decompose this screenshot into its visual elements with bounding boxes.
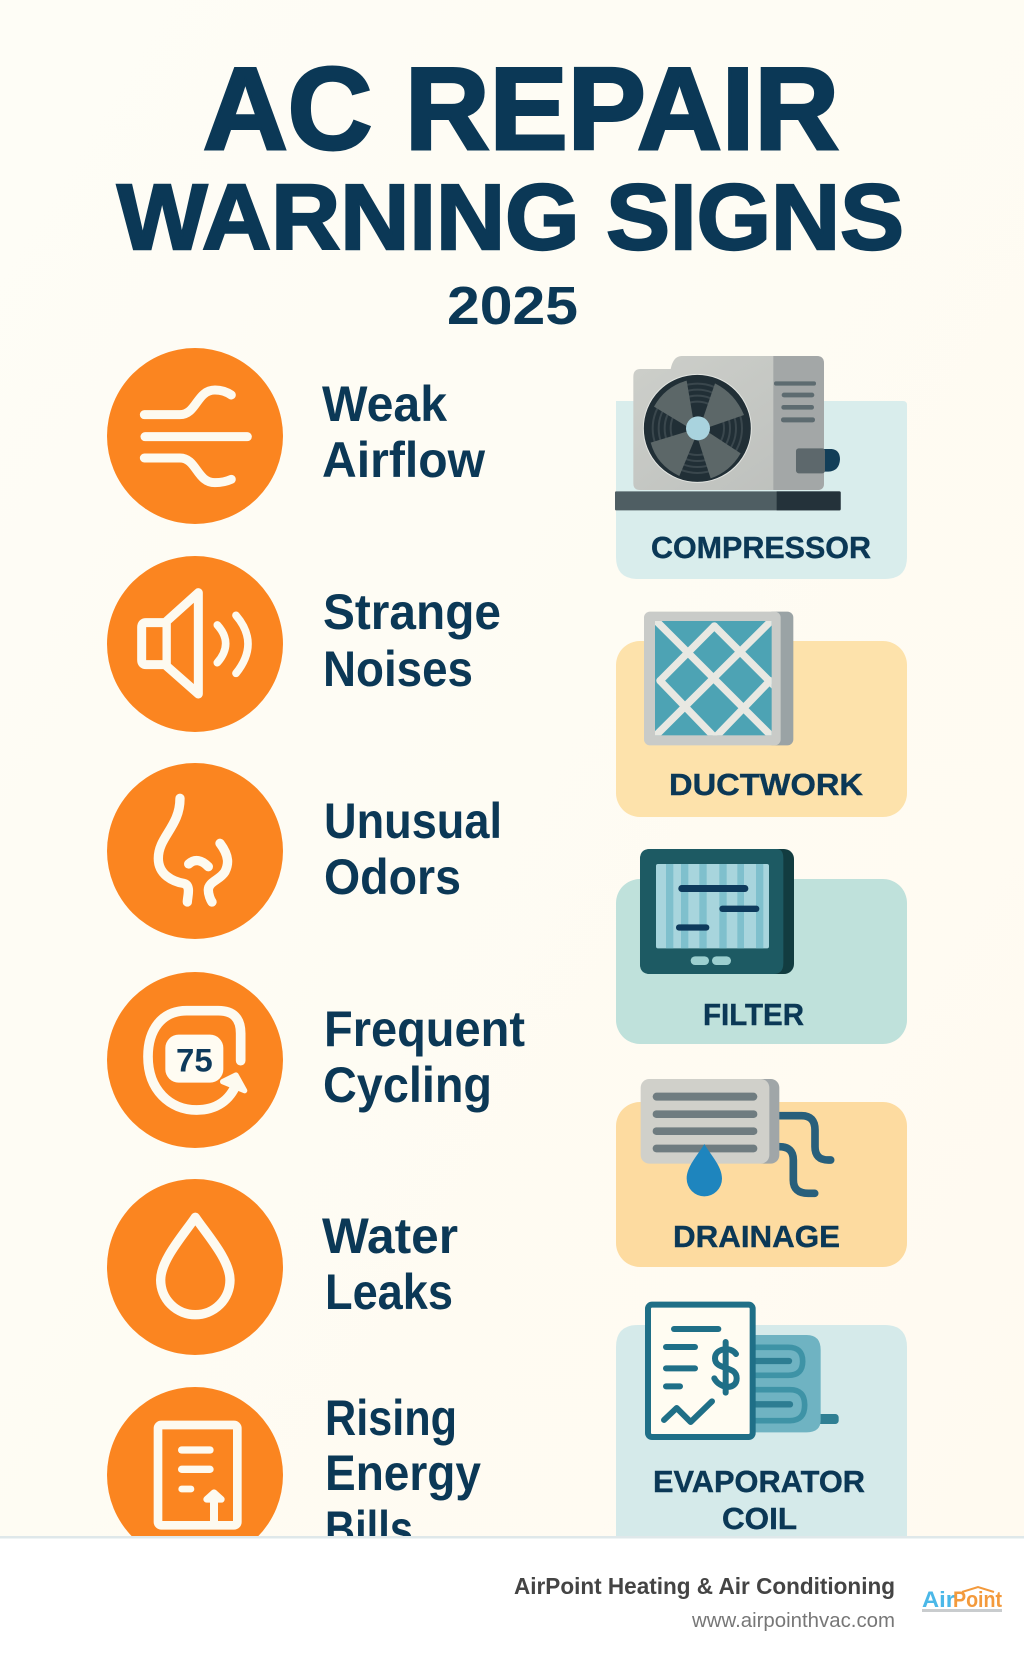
panel: filter (616, 849, 907, 1044)
icon: bill over evaporator coil (648, 1305, 839, 1437)
sign: rising energy bills (107, 1387, 481, 1563)
panel: drainage (616, 1079, 907, 1267)
label: drainage: DRAINAGE (673, 1220, 840, 1254)
icon: speaker (107, 556, 283, 732)
icon: airflow (107, 348, 283, 524)
icon: thermostat display (640, 849, 794, 974)
label: weak airflow: Weak (322, 376, 447, 432)
icon: nose (107, 763, 283, 939)
title (117, 43, 904, 336)
label: rising energy bills: Energy (325, 1445, 481, 1501)
title: 2025 (447, 276, 578, 336)
icon: thermostat cycle: 75 (176, 1043, 213, 1079)
icon: air filter grille (644, 612, 793, 745)
label: unusual odors: Unusual (324, 793, 502, 849)
label: rising energy bills: Bills (325, 1501, 413, 1557)
label: evaporator coil (653, 1465, 865, 1536)
sign: water leaks (107, 1179, 458, 1355)
label: unusual odors: Odors (324, 849, 461, 905)
label: water leaks: Leaks (325, 1264, 453, 1320)
label: water leaks: Water (322, 1208, 458, 1264)
label: strange noises: Noises (323, 641, 473, 697)
logo (922, 1587, 1003, 1612)
footer (0, 1536, 1024, 1666)
icon: thermostat cycle (107, 972, 283, 1148)
label: compressor: COMPRESSOR (651, 531, 871, 565)
company name: AirPoint Heating & Air Conditioning (514, 1573, 895, 1599)
website: www.airpointhvac.com (691, 1610, 895, 1632)
label: filter: FILTER (703, 998, 804, 1032)
label: water leaks (322, 1208, 458, 1320)
label: strange noises (323, 584, 501, 697)
title: WARNING SIGNS (117, 165, 904, 269)
label: frequent cycling (323, 1001, 525, 1113)
logo: Air (922, 1587, 955, 1612)
sign: weak airflow (107, 348, 485, 524)
label: frequent cycling: Cycling (323, 1057, 492, 1113)
sign: strange noises (107, 556, 501, 732)
label: frequent cycling: Frequent (324, 1001, 525, 1057)
panel: evaporator coil (616, 1305, 907, 1540)
label: unusual odors (324, 793, 502, 905)
label: weak airflow (322, 376, 485, 488)
label: ductwork: DUCTWORK (669, 768, 863, 802)
sign: frequent cycling (107, 972, 525, 1148)
icon: outdoor compressor unit (615, 356, 841, 510)
icon: energy bill (107, 1387, 283, 1563)
icon: leaking indoor unit (641, 1079, 831, 1196)
panel: ductwork (616, 612, 907, 817)
icon: water drop (107, 1179, 283, 1355)
label: rising energy bills: Rising (325, 1390, 457, 1446)
label: evaporator coil: EVAPORATOR (653, 1465, 865, 1499)
panel: compressor (615, 356, 907, 579)
sign: unusual odors (107, 763, 502, 939)
label: weak airflow: Airflow (322, 432, 485, 488)
label: rising energy bills (325, 1390, 481, 1557)
label: strange noises: Strange (323, 584, 501, 640)
label: evaporator coil: COIL (722, 1502, 797, 1536)
title: AC REPAIR (203, 43, 839, 174)
logo: Point (953, 1587, 1003, 1612)
